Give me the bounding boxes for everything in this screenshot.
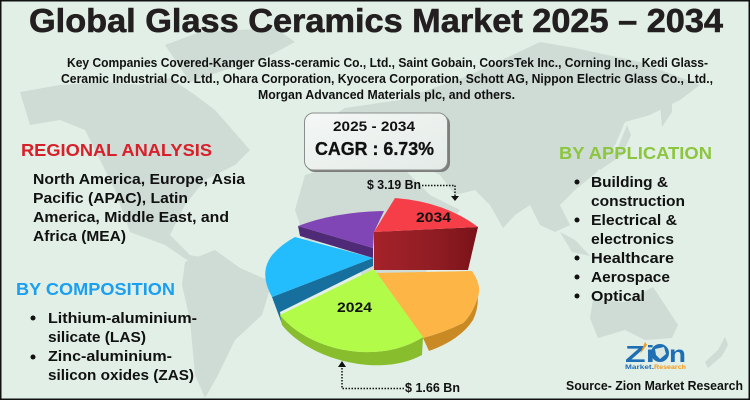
logo: Zion Market Research: Market. bbox=[625, 364, 654, 371]
application list: Optical bbox=[591, 288, 645, 305]
heading: by composition: BY COMPOSITION bbox=[16, 279, 175, 299]
CAGR callout: CAGR : 6.73% bbox=[315, 139, 434, 159]
logo: Zion Market Research: Research bbox=[654, 364, 686, 371]
regional text bbox=[33, 171, 246, 245]
slice: blue bbox=[265, 237, 373, 324]
key companies text: Ceramic Industrial Co. Ltd., Ohara Corporation, Kyocera Corporation, Schott AG, Nippon Electric Glass Co., Ltd., bbox=[61, 71, 713, 86]
callout: 1.66 Bn: $ 1.66 Bn bbox=[405, 381, 460, 395]
composition list bbox=[30, 310, 197, 384]
callout: 3.19 Bn: $ 3.19 Bn bbox=[367, 178, 421, 192]
composition list: Zinc-aluminium- bbox=[48, 348, 172, 365]
application list: Building & bbox=[591, 174, 668, 191]
composition list: Lithium-aluminium- bbox=[48, 310, 197, 327]
pie chart bbox=[265, 198, 479, 365]
regional text: Pacific (APAC), Latin bbox=[33, 190, 188, 207]
slice: purple bbox=[298, 211, 384, 258]
callout: 1.66 Bn bbox=[338, 361, 460, 395]
heading: regional analysis: REGIONAL ANALYSIS bbox=[21, 140, 212, 160]
application list: Healthcare bbox=[591, 250, 674, 267]
callout: 3.19 Bn bbox=[367, 178, 459, 201]
label: 2034: 2034 bbox=[416, 210, 452, 225]
composition list: silicate (LAS) bbox=[48, 329, 146, 346]
regional text: North America, Europe, Asia bbox=[33, 171, 246, 188]
logo: Zion Market Research: Zi bbox=[625, 341, 655, 367]
slice: orange bbox=[377, 271, 479, 351]
key companies text bbox=[61, 55, 713, 102]
heading: by application: BY APPLICATION bbox=[559, 143, 712, 163]
CAGR callout: 2025 - 2034 bbox=[333, 118, 415, 134]
regional text: Africa (MEA) bbox=[33, 228, 126, 245]
logo: Zion Market Research: n bbox=[669, 341, 686, 367]
CAGR callout bbox=[304, 113, 450, 172]
application list bbox=[574, 174, 685, 305]
slice: green bbox=[280, 269, 423, 365]
application list: construction bbox=[591, 193, 685, 210]
label: 2024: 2024 bbox=[337, 300, 373, 315]
key companies text: Morgan Advanced Materials plc, and others. bbox=[258, 87, 515, 102]
application list: Aerospace bbox=[591, 269, 670, 286]
source: Source- Zion Market Research bbox=[566, 379, 743, 393]
application list: electronics bbox=[591, 231, 674, 248]
application list: Electrical & bbox=[591, 212, 677, 229]
regional text: America, Middle East, and bbox=[33, 209, 229, 226]
composition list: silicon oxides (ZAS) bbox=[48, 367, 194, 384]
logo: Zion Market Research bbox=[625, 341, 686, 371]
slice: red bbox=[374, 198, 478, 270]
key companies text: Key Companies Covered-Kanger Glass-ceramic Co., Ltd., Saint Gobain, CoorsTek Inc., Corning Inc., Kedi Glass- bbox=[67, 55, 708, 70]
title: Global Glass Ceramics Market 2025 – 2034 bbox=[29, 2, 724, 39]
